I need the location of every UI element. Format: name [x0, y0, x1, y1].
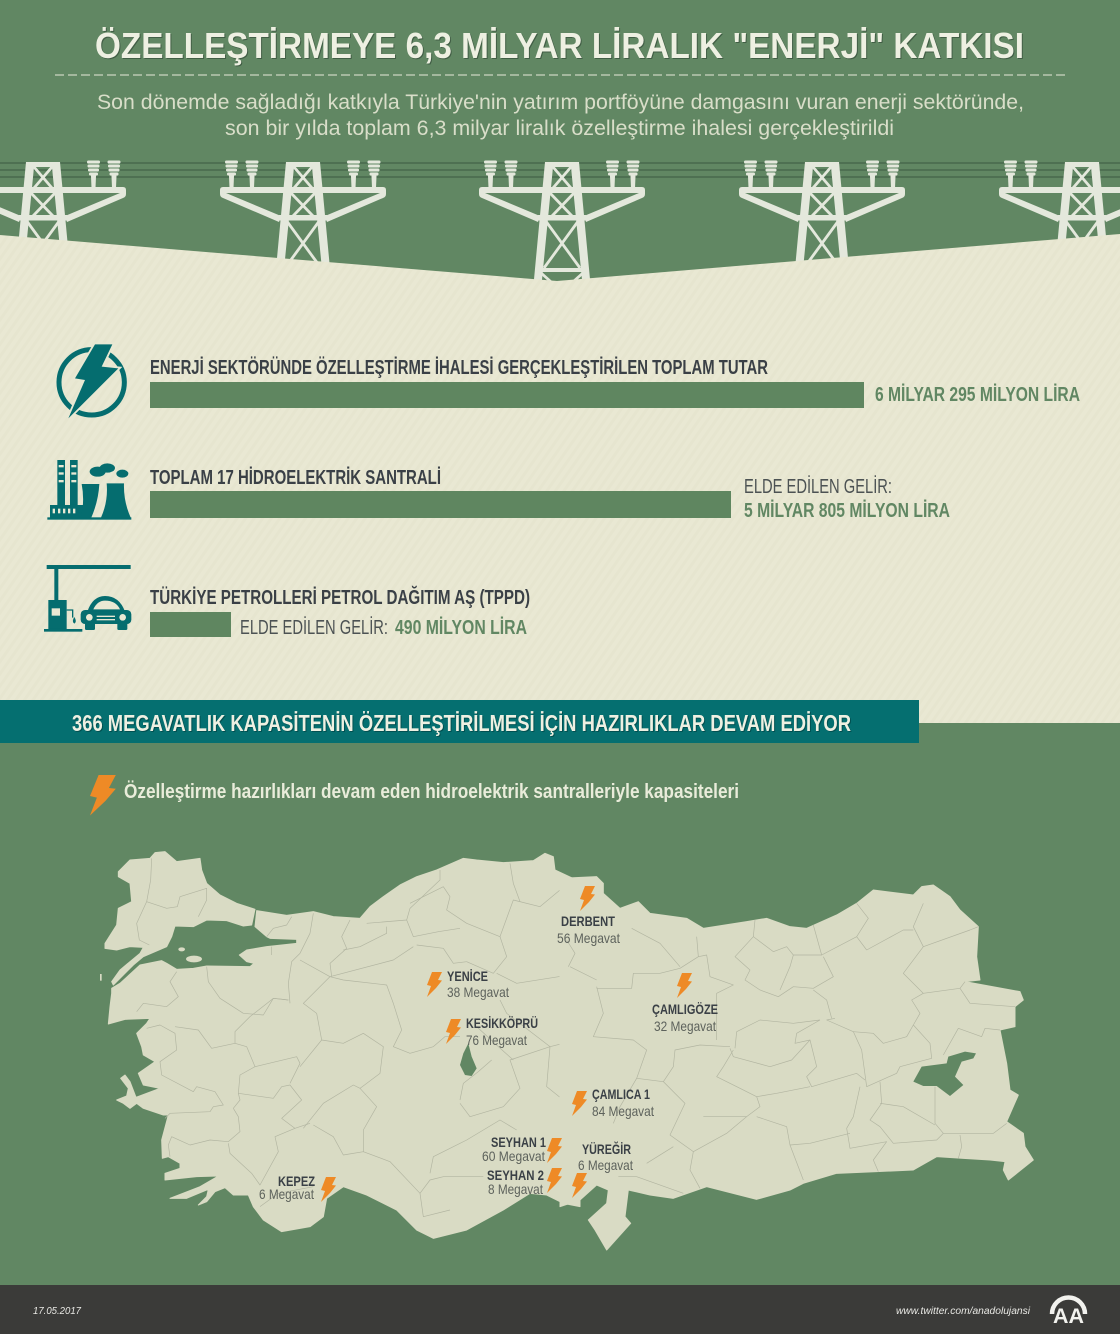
footer: www.twitter.com/anadolujansi: [896, 1306, 1031, 1317]
footer: [0, 1285, 1120, 1334]
power lines and pylons: [0, 160, 1120, 290]
plant: Çamlıgöze: ÇAMLIGÖZE: [652, 1001, 718, 1017]
plant: Yenice: 38 Megavat: [447, 984, 509, 1000]
section banner: 366 MEGAVATLIK KAPASİTENİN ÖZELLEŞTİRİLMESİ İÇİN HAZIRLIKLAR DEVAM EDİYOR: [72, 710, 851, 736]
plant: Yenice: [427, 968, 509, 1000]
plant: Seyhan 1: SEYHAN 1: [491, 1134, 546, 1150]
row 2: hydroelectric plants: 5 MİLYAR 805 MİLYON LİRA: [744, 499, 950, 522]
plant: Seyhan 2: [487, 1167, 562, 1197]
plant: Kesikköprü: [446, 1015, 538, 1048]
footer: 17.05.2017: [33, 1306, 81, 1317]
plant: Seyhan 2: SEYHAN 2: [487, 1167, 544, 1183]
plant: Derbent: [557, 886, 620, 946]
plant: Seyhan 2: 8 Megavat: [488, 1181, 543, 1197]
subtitle: [97, 91, 1024, 140]
title: ÖZELLEŞTİRMEYE 6,3 MİLYAR LİRALIK "ENERJİ" KATKISI: [95, 25, 1024, 66]
section banner: [0, 700, 919, 743]
subtitle: son bir yılda toplam 6,3 milyar liralık özelleştirme ihalesi gerçekleştirildi: [225, 117, 894, 140]
plant: Kesikköprü: KESİKKÖPRÜ: [466, 1015, 538, 1031]
row 1: total amount: ENERJİ SEKTÖRÜNDE ÖZELLEŞTİRME İHALESİ GERÇEKLEŞTİRİLEN TOPLAM TUTAR: [150, 356, 768, 379]
row 2: hydroelectric plants: ELDE EDİLEN GELİR:: [744, 475, 892, 498]
legend: [90, 775, 739, 816]
icon: energy bolt in ring: [59, 344, 124, 418]
row 3: TPPD: [150, 585, 530, 639]
plant: Yüreğir: 6 Megavat: [578, 1157, 633, 1173]
plant: Çamlıgöze: [652, 973, 718, 1034]
plant: Kesikköprü: 76 Megavat: [466, 1032, 527, 1048]
plant: Yenice: YENİCE: [447, 968, 488, 984]
plant: Seyhan 1: [482, 1134, 562, 1164]
plant: Derbent: DERBENT: [561, 913, 615, 929]
plant: Kepez: 6 Megavat: [259, 1186, 314, 1202]
plant: Derbent: 56 Megavat: [557, 930, 620, 946]
plant: Yüreğir: YÜREĞİR: [582, 1140, 631, 1157]
row 2: hydroelectric plants: [150, 466, 950, 522]
icon: AA logo: [1052, 1298, 1085, 1328]
panel: cream content background: [0, 234, 1120, 723]
icon: fuel station and car: [44, 565, 131, 632]
plant: Kepez: KEPEZ: [278, 1173, 315, 1189]
row 3: TPPD: 490 MİLYON LİRA: [395, 616, 527, 639]
icon: power plant: [47, 460, 131, 520]
legend: Özelleştirme hazırlıkları devam eden hidroelektrik santralleriyle kapasiteleri: [124, 780, 739, 803]
plant: Yüreğir: [572, 1140, 633, 1198]
map of Turkey: [100, 852, 1033, 1250]
plant: Çamlıca 1: [572, 1086, 654, 1119]
subtitle: Son dönemde sağladığı katkıyla Türkiye'nin yatırım portföyüne damgasını vuran enerji sektöründe,: [97, 91, 1024, 114]
row 2: hydroelectric plants: TOPLAM 17 HİDROELEKTRİK SANTRALİ: [150, 466, 441, 489]
row 3: TPPD: TÜRKİYE PETROLLERİ PETROL DAĞITIM AŞ (TPPD): [150, 585, 530, 609]
plant: Çamlıca 1: ÇAMLICA 1: [592, 1086, 650, 1102]
plant: Kepez: [259, 1173, 336, 1202]
icon: AA logo: AA: [1053, 1305, 1084, 1328]
plant: Çamlıgöze: 32 Megavat: [654, 1018, 716, 1034]
plant: Çamlıca 1: 84 Megavat: [592, 1103, 654, 1119]
plant: Seyhan 1: 60 Megavat: [482, 1148, 545, 1164]
row 1: total amount: [150, 356, 1080, 408]
row 3: TPPD: ELDE EDİLEN GELİR:: [240, 616, 388, 639]
